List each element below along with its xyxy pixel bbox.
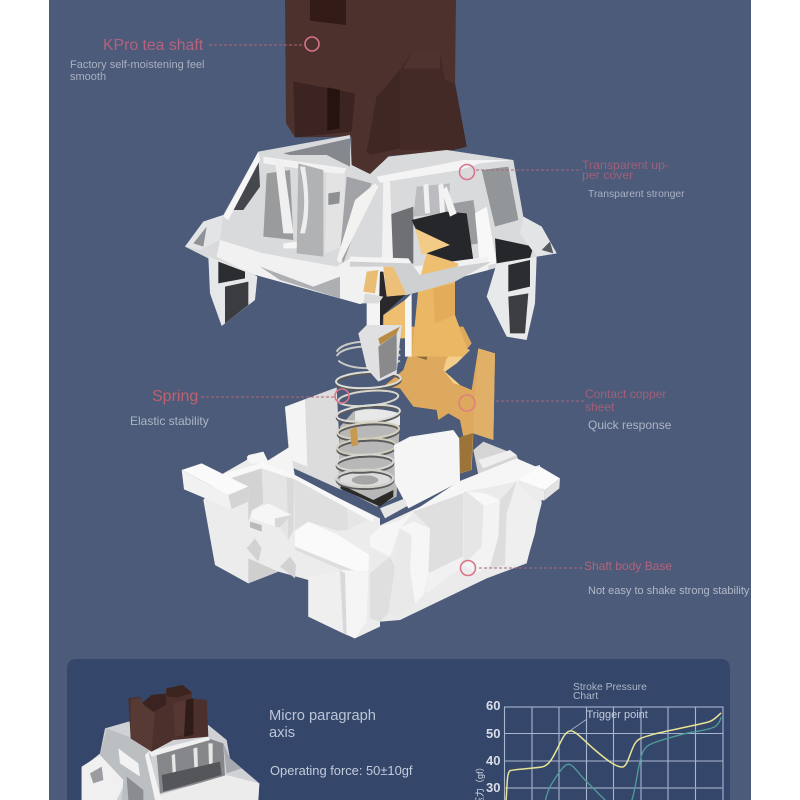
chart y axis labels: 50 <box>486 726 500 741</box>
callout: transparent upper cover: per cover <box>582 168 633 182</box>
copper upper strip <box>350 228 492 357</box>
heading: micro paragraph axis <box>269 708 376 741</box>
spring top guide pin <box>358 325 402 382</box>
icon: assembled switch <box>82 685 259 800</box>
callout: transparent upper cover: Transparent up- <box>582 158 669 172</box>
callout: contact copper sheet: Quick response <box>588 418 672 432</box>
callout: spring: Elastic stability <box>130 414 209 428</box>
chart y axis labels: 40 <box>486 753 500 768</box>
callout: shaft body base: Shaft body Base <box>584 559 672 573</box>
callout: shaft body base: Not easy to shake strong stability <box>588 585 750 597</box>
switch base <box>182 430 560 638</box>
copper tail in base slot <box>460 433 473 473</box>
callout: transparent upper cover: Transparent stronger <box>588 189 685 200</box>
callout: KPro tea shaft: KPro tea shaft <box>103 37 204 54</box>
callout: spring: Spring <box>152 388 198 405</box>
heading: micro paragraph axis: axis <box>269 725 295 741</box>
chart title: Stroke Pressure <box>573 682 647 693</box>
chart title <box>573 682 647 702</box>
callout: contact copper sheet <box>459 387 672 432</box>
cover clip legs <box>208 257 537 340</box>
callout: contact copper sheet: sheet <box>585 400 615 414</box>
line chart: stroke pressure <box>504 707 723 800</box>
switch stem (tea shaft) <box>285 0 467 175</box>
panel: specifications <box>67 659 730 800</box>
callout: transparent upper cover <box>460 158 685 200</box>
heading: micro paragraph axis: Micro paragraph <box>269 708 376 724</box>
chart y axis labels <box>474 698 500 800</box>
callout: shaft body base <box>460 559 750 597</box>
callout: KPro tea shaft <box>70 37 319 83</box>
callout: spring <box>130 388 349 428</box>
text: operating force: Operating force: 50±10gf <box>270 763 413 778</box>
spring <box>336 341 401 489</box>
base back wall <box>285 387 400 507</box>
callout: contact copper sheet: Contact copper <box>585 387 666 401</box>
callout: KPro tea shaft: Factory self-moistening feel <box>70 59 204 71</box>
base left half <box>182 447 380 638</box>
contact copper sheet <box>383 327 495 473</box>
chart title: Chart <box>573 691 598 702</box>
chart y axis labels: 30 <box>486 780 500 795</box>
callout: KPro tea shaft: smooth <box>70 71 106 83</box>
transparent upper cover <box>185 135 557 304</box>
chart y axis labels: 60 <box>486 698 500 713</box>
base right half <box>367 430 560 622</box>
line chart: stroke pressure: Trigger point <box>586 709 648 721</box>
